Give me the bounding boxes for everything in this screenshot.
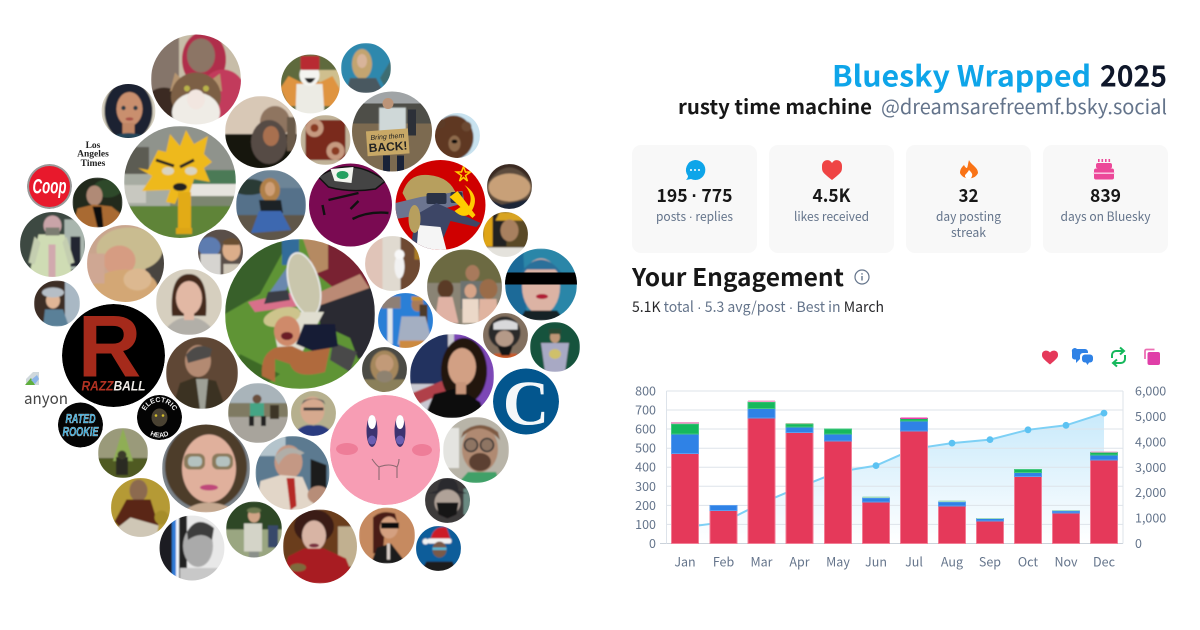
icon: likes heart (1042, 351, 1058, 364)
stat card: day posting streak: day posting (936, 206, 1001, 225)
avatar bubble cluster (20, 34, 580, 584)
stat card: likes received (769, 145, 894, 253)
icon: heart (822, 160, 842, 180)
avatar: protester with Bring Them Back sign: BACK! (368, 138, 408, 155)
avatar: figure in green trees (98, 428, 148, 478)
avatar: Los Angeles Times wordmark (77, 141, 109, 169)
avatar: Los Angeles Times wordmark: Times (81, 159, 106, 169)
header: display name and handle: @dreamsarefreemf.bsky.social (881, 91, 1167, 120)
avatar: red patterned textile (300, 115, 350, 165)
broken image placeholder with alt text: anyon (24, 385, 68, 409)
stat card: days on Bluesky: 839 (1090, 182, 1121, 208)
left axis labels: 700 (635, 400, 656, 418)
avatar: man in green cap (226, 502, 282, 560)
month labels: Aug (941, 552, 963, 570)
avatar: Los Angeles Times wordmark: Angeles (77, 150, 109, 160)
avatar: baseball player (530, 322, 580, 372)
avatar: blue-haired woman with censor bar (505, 248, 577, 320)
chart: monthly engagement stacked bars with cumulative area line (635, 380, 1166, 570)
month labels: May (826, 552, 850, 570)
cumulative line (685, 410, 1107, 527)
month labels: Apr (789, 552, 810, 570)
stacked bars (671, 400, 1118, 544)
avatar: grizzly bear (434, 112, 480, 160)
left axis labels: 200 (635, 495, 656, 514)
avatar: protester with Bring Them Back sign (352, 92, 432, 172)
stat card: day posting streak: streak (951, 222, 986, 241)
month labels: Jul (905, 552, 923, 570)
avatar: white kitten and curtain (364, 236, 422, 292)
avatar: Rated Rookie logo: ROOKIE (62, 424, 99, 439)
avatar: man in tan jacket (72, 178, 122, 228)
avatar: man riding on the grass with drum (225, 239, 375, 389)
avatar: blonde woman with cat (86, 224, 166, 306)
icon: info (855, 270, 869, 284)
avatar: boy with hat (34, 280, 80, 326)
avatar: Chronicle C logo: C (503, 368, 549, 438)
stat card: posts and replies: 195 · 775 (656, 182, 732, 208)
avatar: Copernicus painting (110, 478, 170, 538)
month labels (674, 552, 1116, 570)
right axis labels: 1,000 (1135, 508, 1166, 526)
avatar: Rated Rookie logo (58, 402, 103, 448)
right axis labels: 3,000 (1135, 457, 1166, 476)
stat card: days on Bluesky: days on Bluesky (1060, 206, 1151, 225)
avatar: woman in blue dress by the sea (231, 170, 306, 241)
stat card: likes received: 4.5K (812, 182, 851, 208)
month labels: Sep (979, 552, 1001, 570)
avatar: pastel Darth Vader (20, 212, 86, 278)
avatar: Electric Head logo: ELECTRIC (142, 397, 177, 410)
avatar: Electric Head logo: HEAD (150, 430, 168, 438)
icon: quotes squares (1145, 350, 1160, 365)
header: display name and handle: rusty time machine (678, 91, 872, 120)
month labels: Jun (865, 552, 887, 570)
avatar: purple Onion cartoon (308, 163, 392, 247)
avatar: man crouching on a dock (228, 383, 288, 443)
left axis labels: 600 (635, 418, 656, 438)
month labels: Feb (713, 552, 734, 570)
right axis labels: 2,000 (1135, 482, 1166, 501)
avatar: man in beanie (166, 337, 238, 409)
avatar: dark-haired young woman (156, 269, 222, 335)
avatar: man in red hoodie with cat (151, 34, 241, 124)
avatar: Electric Head logo (137, 395, 182, 440)
avatar: Kirby face (330, 395, 440, 505)
avatar: blonde woman against blue sky (341, 43, 391, 93)
avatar: Razzball logo (62, 296, 165, 407)
stat card: days on Bluesky (1043, 145, 1168, 253)
icon: replies bubbles (1072, 348, 1093, 365)
right axis labels (1135, 380, 1166, 552)
right axis labels: 4,000 (1135, 432, 1166, 450)
avatar: clown cartoon (280, 54, 340, 114)
left axis labels: 800 (635, 380, 656, 400)
broken image placeholder with alt text (24, 372, 68, 409)
cumulative area (685, 413, 1104, 544)
icon: reposts arrows (1112, 348, 1125, 366)
left axis labels: 500 (635, 438, 656, 456)
month labels: Jan (674, 552, 696, 570)
avatar: woman in red turtleneck (283, 510, 358, 584)
heading: Your Engagement: Your Engagement (631, 258, 844, 293)
avatar: Coop logo (27, 164, 72, 209)
avatar: protester with Bring Them Back sign: Bring them (370, 133, 405, 142)
icon: speech bubble (686, 160, 705, 180)
avatar: man in Santa hat (416, 526, 462, 572)
legend icons (1042, 348, 1160, 366)
left axis labels: 300 (635, 476, 656, 495)
avatar: Los Angeles Times wordmark: Los (86, 141, 101, 151)
avatar: man with raised sign on blue (378, 292, 434, 348)
avatar: bearded man in patterned shirt (362, 346, 408, 394)
avatar: rider in helmet (482, 312, 528, 358)
stat card: posts and replies: posts · replies (656, 206, 733, 225)
avatar: woman with American flag (410, 334, 494, 418)
month labels: Nov (1054, 552, 1078, 570)
avatar: man in bowler hat and mask (424, 478, 472, 524)
avatar: cartoon woman (102, 81, 156, 141)
avatar: Soviet cartoon penguin (396, 160, 486, 250)
header: title: Bluesky Wrapped (832, 54, 1091, 96)
stat card: posts and replies (632, 145, 757, 253)
month labels: Mar (750, 552, 773, 570)
month labels: Dec (1093, 552, 1116, 570)
left axis labels (635, 380, 656, 552)
icon: flame (960, 160, 978, 179)
avatar: Razzball logo: RAZZBALL (82, 378, 146, 394)
stat card: day posting streak (906, 145, 1031, 253)
header: title: 2025 (1100, 54, 1167, 96)
right axis labels: 0 (1135, 533, 1142, 552)
avatar: family portrait (426, 249, 502, 325)
left axis labels: 400 (635, 456, 656, 476)
avatar: Razzball logo: R (78, 296, 141, 396)
avatar: Rated Rookie logo: RATED (66, 411, 96, 426)
avatar: man in yellow truck (482, 212, 528, 258)
month labels: Oct (1018, 552, 1038, 570)
avatar: older man in white suit with phone (256, 436, 330, 510)
avatar: man with R2-D2 (198, 229, 244, 276)
avatar: man with round glasses and cap (443, 417, 509, 483)
avatar: smiling man with glasses (290, 390, 336, 436)
header: display name and handle (678, 91, 1167, 120)
right axis labels: 5,000 (1135, 406, 1166, 425)
engagement summary line: 5.1K total · 5.3 avg/post · Best in March (632, 296, 884, 317)
left axis labels: 0 (649, 533, 656, 552)
avatar: Coop logo: Coop (32, 176, 67, 198)
avatar: round-faced man (486, 164, 532, 210)
icon: birthday cake (1093, 159, 1115, 180)
avatar: woman with cat-eye glasses (162, 424, 250, 512)
avatar: woman with sunglasses (359, 508, 415, 564)
right axis labels: 6,000 (1135, 380, 1166, 400)
stat card: likes received: likes received (794, 206, 869, 225)
avatar: man with blue lightsaber (159, 515, 225, 582)
avatar: yellow sun mascot (124, 126, 236, 242)
stat card: day posting streak: 32 (958, 182, 978, 208)
left axis labels: 100 (635, 514, 656, 533)
avatar: bearded man smoking (225, 96, 297, 170)
